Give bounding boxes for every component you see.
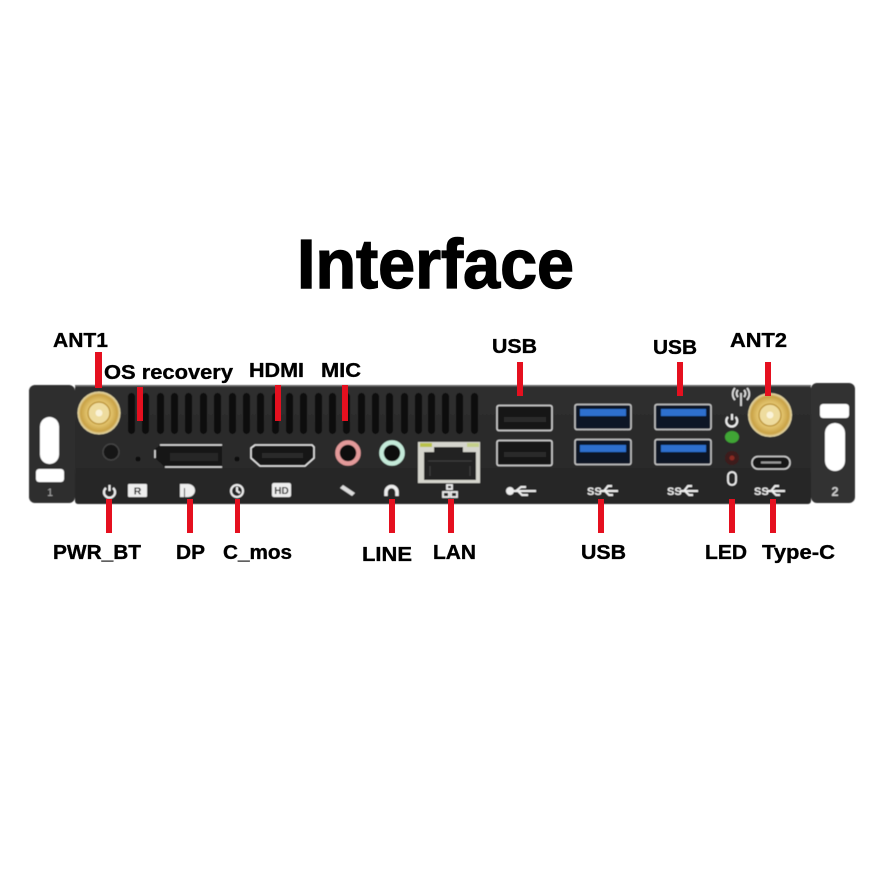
connector: HDMI bbox=[251, 445, 314, 466]
connector: OS recovery pinhole bbox=[136, 456, 140, 462]
icon: SS USB right bbox=[754, 486, 785, 498]
label: ANT2: ANT2 bbox=[730, 330, 787, 352]
label: LINE: LINE bbox=[362, 544, 412, 566]
label: Type-C: Type-C bbox=[762, 542, 835, 564]
connector: Type-C bbox=[752, 456, 790, 469]
icon: recovery R bbox=[128, 484, 147, 498]
icon: DP bbox=[180, 484, 195, 497]
connector: power button bbox=[103, 444, 119, 460]
panel: mini PC rear panel bbox=[29, 383, 855, 504]
icon: SS USB middle bbox=[667, 486, 698, 498]
icon: HD: HD bbox=[274, 486, 289, 497]
label: ANT1: ANT1 bbox=[53, 330, 108, 352]
label: OS recovery: OS recovery bbox=[104, 362, 234, 384]
connector: LINE jack bbox=[382, 442, 402, 464]
label: USB bottom: USB bbox=[581, 542, 626, 564]
label: C_mos: C_mos bbox=[223, 542, 292, 564]
connector: USB 3.0 pair right bbox=[655, 404, 711, 464]
icon: headphones bbox=[386, 487, 397, 496]
right mounting ear: 2 bbox=[831, 484, 839, 499]
connector: CMOS pinhole bbox=[234, 456, 240, 462]
LED indicators bbox=[725, 431, 739, 465]
icon: SS USB left bbox=[587, 486, 618, 498]
icon: wireless bbox=[733, 388, 749, 406]
connector: USB 3.0 pair left bbox=[575, 404, 631, 464]
icon: clock bbox=[231, 485, 243, 497]
label: USB top left: USB bbox=[492, 336, 537, 358]
icon: SS USB middle: SS bbox=[667, 486, 682, 498]
label: DP: DP bbox=[176, 542, 205, 564]
left mounting ear bbox=[29, 385, 75, 503]
label: MIC: MIC bbox=[321, 360, 361, 382]
left mounting ear: 1 bbox=[47, 487, 53, 499]
label: LAN: LAN bbox=[433, 542, 476, 564]
connector: ANT1 bbox=[78, 392, 120, 434]
title: Interface bbox=[297, 225, 574, 303]
icon: USB symbol bbox=[507, 487, 536, 495]
right mounting ear bbox=[811, 383, 855, 503]
icon: power bbox=[104, 485, 115, 498]
connector: MIC jack bbox=[338, 442, 358, 464]
red pointer bars bbox=[95, 352, 776, 533]
ventilation slots bbox=[128, 393, 478, 434]
icon: microphone bbox=[340, 485, 355, 496]
icon: network bbox=[443, 485, 457, 497]
connector: LAN bbox=[418, 442, 480, 483]
label: PWR_BT: PWR_BT bbox=[53, 542, 141, 564]
icon: recovery R: R bbox=[134, 486, 142, 498]
connector: USB 2.0 pair bbox=[497, 406, 552, 466]
icon: SS USB right: SS bbox=[754, 486, 769, 498]
icon: disk bbox=[728, 472, 736, 485]
label: LED: LED bbox=[705, 542, 747, 564]
connector: DisplayPort bbox=[155, 445, 222, 467]
icon: LED power bbox=[726, 414, 737, 427]
label: USB top right: USB bbox=[653, 337, 697, 359]
icon: SS USB left: SS bbox=[587, 486, 602, 498]
connector: ANT2 bbox=[748, 393, 792, 437]
main chassis bbox=[75, 385, 811, 504]
label: HDMI: HDMI bbox=[249, 360, 304, 382]
icon: HD bbox=[272, 483, 291, 497]
